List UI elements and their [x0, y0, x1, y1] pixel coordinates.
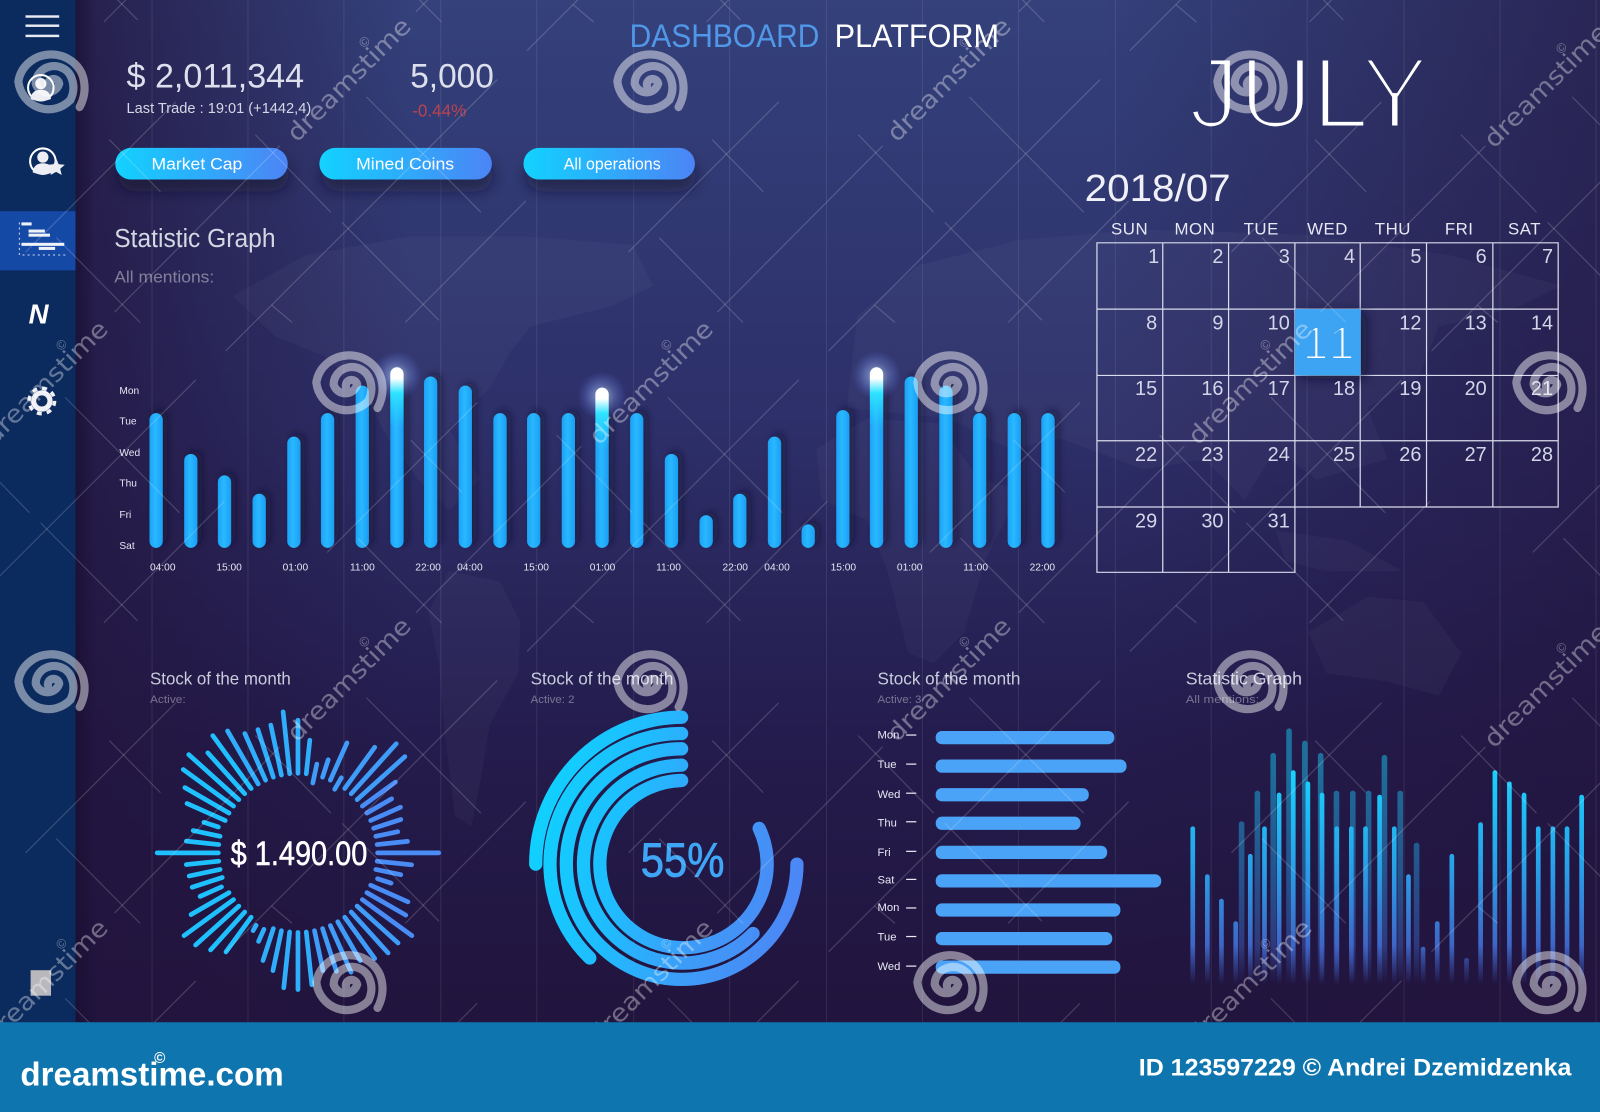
watermark overlay: ©: [1257, 336, 1274, 354]
month title: JULY: [1189, 38, 1429, 150]
calendar: [1085, 167, 1558, 572]
calendar days: 13: [1465, 313, 1487, 335]
calendar days: 24: [1268, 444, 1290, 466]
world map backdrop: [233, 230, 1561, 826]
calendar date heading: 2018/07: [1085, 167, 1231, 209]
button: market cap: Market Cap: [152, 155, 242, 173]
subheading: Active: 3: [878, 694, 921, 706]
watermark overlay: dreamstime: [881, 611, 1017, 747]
day labels: Tue: [878, 759, 896, 771]
footer logo: dreamstime.com: [20, 1056, 284, 1093]
statistic graph heading: All mentions:: [114, 268, 214, 287]
x axis labels: 15:00: [523, 562, 549, 573]
calendar days: 4: [1344, 246, 1355, 268]
watermark overlay: dreamstime: [583, 314, 719, 450]
x axis labels: 15:00: [831, 562, 856, 573]
button: all operations: [523, 148, 695, 180]
watermark overlay: ©: [356, 633, 373, 651]
buttons: [115, 148, 695, 180]
footer credit: ID 123597229 © Andrei Dzemidzenka: [1139, 1054, 1572, 1081]
calendar days: 1: [1148, 246, 1159, 268]
button: mined coins: Mined Coins: [356, 155, 454, 173]
calendar days: 21: [1531, 378, 1553, 400]
statistic graph heading: Statistic Graph: [114, 225, 276, 253]
calendar days: 6: [1476, 246, 1487, 268]
bar chart: statistic graph: [119, 351, 1055, 573]
watermark overlay: dreamstime: [1182, 913, 1318, 1049]
calendar days: 12: [1399, 313, 1421, 335]
day labels: Thu: [878, 817, 897, 829]
weekday headers: TUE: [1244, 220, 1279, 239]
concentric arcs: [536, 717, 797, 979]
calendar days: 10: [1268, 313, 1290, 335]
watermark overlay: ©: [956, 633, 973, 651]
x axis labels: 04:00: [764, 562, 790, 573]
calendar days: 28: [1531, 444, 1553, 466]
calendar days: 19: [1399, 378, 1421, 400]
day labels: Sat: [878, 874, 895, 886]
subheading: Active: 2: [531, 694, 574, 706]
panel: horizontal bar chart: [878, 669, 1161, 974]
tick marks: [906, 735, 916, 966]
button: market cap: [115, 148, 288, 180]
icon: settings gear: [29, 388, 55, 414]
bars: [149, 367, 1055, 548]
icon: favourite user: [30, 148, 65, 175]
day labels: Fri: [878, 847, 891, 859]
watermark overlay: ©: [658, 336, 675, 354]
percent value: 55%: [641, 834, 724, 887]
watermark overlay: ©: [1257, 935, 1274, 953]
x axis labels: 11:00: [350, 562, 375, 573]
watermark overlay: ©: [658, 935, 675, 953]
footer band: [0, 1022, 1600, 1112]
y axis labels: Mon: [119, 386, 139, 397]
heading: Statistic Graph: [1186, 669, 1302, 689]
x axis labels: [150, 562, 1055, 573]
day labels: Tue: [878, 932, 896, 944]
highlighted bar tips: [372, 351, 901, 449]
watermark overlay: dreamstime: [881, 11, 1017, 147]
calendar days: 20: [1465, 378, 1487, 400]
radial spokes: [157, 712, 439, 990]
calendar days: 27: [1465, 444, 1487, 466]
title: DASHBOARD: [630, 17, 819, 54]
calendar days: 17: [1268, 378, 1290, 400]
y axis labels: Tue: [119, 416, 137, 427]
calendar days: 30: [1201, 510, 1223, 532]
calendar days: 7: [1542, 246, 1553, 268]
day labels: Mon: [878, 730, 899, 742]
y axis labels: Fri: [119, 510, 131, 521]
x axis labels: 22:00: [1030, 562, 1055, 573]
calendar days: 25: [1333, 444, 1355, 466]
calendar days: 29: [1135, 510, 1157, 532]
back bars: [1239, 728, 1419, 984]
weekday headers: SAT: [1508, 220, 1541, 239]
x axis labels: 01:00: [283, 562, 308, 573]
x axis labels: 04:00: [457, 562, 483, 573]
calendar days: 8: [1146, 313, 1157, 335]
weekday headers: FRI: [1445, 220, 1474, 239]
x axis labels: 22:00: [722, 562, 748, 573]
icon: profile: [28, 75, 54, 101]
day labels: [878, 730, 900, 973]
x axis labels: 15:00: [216, 562, 242, 573]
panel: radial stock chart: [150, 669, 439, 990]
x axis labels: 01:00: [897, 562, 923, 573]
calendar days: 31: [1268, 510, 1290, 532]
x axis labels: 04:00: [150, 562, 176, 573]
subheading: Active:: [150, 694, 186, 706]
subheading: All mentions:: [1186, 694, 1259, 706]
watermark overlay: dreamstime: [1478, 617, 1600, 753]
x axis labels: 11:00: [963, 562, 988, 573]
watermark overlay: dreamstime: [281, 611, 417, 747]
icon: small document: [31, 970, 51, 996]
day labels: Mon: [878, 902, 899, 914]
title: PLATFORM: [835, 17, 999, 54]
button: mined coins: [319, 148, 492, 180]
calendar days: 22: [1135, 444, 1157, 466]
x axis labels: 11:00: [656, 562, 681, 573]
calendar days: 26: [1399, 444, 1421, 466]
watermark overlay: dreamstime: [583, 913, 719, 1049]
calendar days: 16: [1201, 378, 1223, 400]
statistic graph heading: [114, 225, 276, 287]
watermark overlay: ©: [1553, 639, 1570, 657]
calendar days: 3: [1279, 246, 1290, 268]
watermark overlay: dreamstime: [1182, 314, 1318, 450]
y axis labels: [119, 386, 140, 552]
panel: concentric arc chart: [531, 669, 797, 979]
x axis labels: 22:00: [415, 562, 441, 573]
y axis labels: Wed: [119, 448, 140, 459]
active item: gantt chart: [0, 211, 76, 270]
weekday headers: THU: [1375, 220, 1411, 239]
calendar days: 23: [1201, 444, 1223, 466]
horizontal bars: [936, 731, 1161, 974]
calendar days: [1135, 246, 1553, 532]
icon: N logo: N: [29, 298, 50, 329]
calendar days: 18: [1333, 378, 1355, 400]
calendar days: 2: [1212, 246, 1223, 268]
heading: Stock of the month: [150, 669, 291, 689]
header stats: [127, 58, 494, 120]
y axis labels: Sat: [119, 541, 135, 552]
heading: Stock of the month: [878, 669, 1020, 689]
day labels: Wed: [878, 789, 900, 801]
watermark overlay: ©: [956, 33, 973, 51]
front bars: [1190, 770, 1584, 984]
center value: $ 1.490.00: [231, 835, 367, 873]
second value: 5,000: [410, 58, 494, 96]
weekday headers: WED: [1307, 220, 1348, 239]
percent change: -0.44%: [412, 100, 466, 120]
footer logo: ©: [154, 1050, 166, 1067]
total value: $ 2,011,344: [127, 58, 304, 96]
icon: menu: [26, 15, 59, 37]
calendar days: 9: [1212, 313, 1223, 335]
calendar days: 14: [1531, 313, 1553, 335]
x axis labels: 01:00: [590, 562, 616, 573]
weekday headers: SUN: [1111, 220, 1148, 239]
y axis labels: Thu: [119, 479, 137, 490]
watermark overlay: ©: [53, 935, 70, 953]
calendar grid: [1097, 243, 1558, 572]
weekday headers: MON: [1174, 220, 1215, 239]
day labels: Wed: [878, 961, 900, 973]
watermark overlay: dreamstime: [1478, 17, 1600, 153]
heading: Stock of the month: [531, 669, 673, 689]
calendar days: 5: [1410, 246, 1421, 268]
calendar days: 15: [1135, 378, 1157, 400]
watermark overlay: ©: [356, 33, 373, 51]
last trade: Last Trade : 19:01 (+1442,4): [127, 101, 311, 117]
watermark overlay: ©: [53, 336, 70, 354]
watermark overlay: ©: [1553, 39, 1570, 57]
panel: fading bar chart: [1186, 669, 1584, 984]
watermark overlay: dreamstime: [281, 11, 417, 147]
highlighted day 11: 11: [1303, 317, 1359, 369]
highlighted day 11: [1295, 309, 1361, 375]
sidebar: [0, 0, 96, 1022]
weekday headers: [1111, 220, 1541, 239]
button: all operations: All operations: [564, 155, 661, 173]
title: [630, 17, 999, 54]
